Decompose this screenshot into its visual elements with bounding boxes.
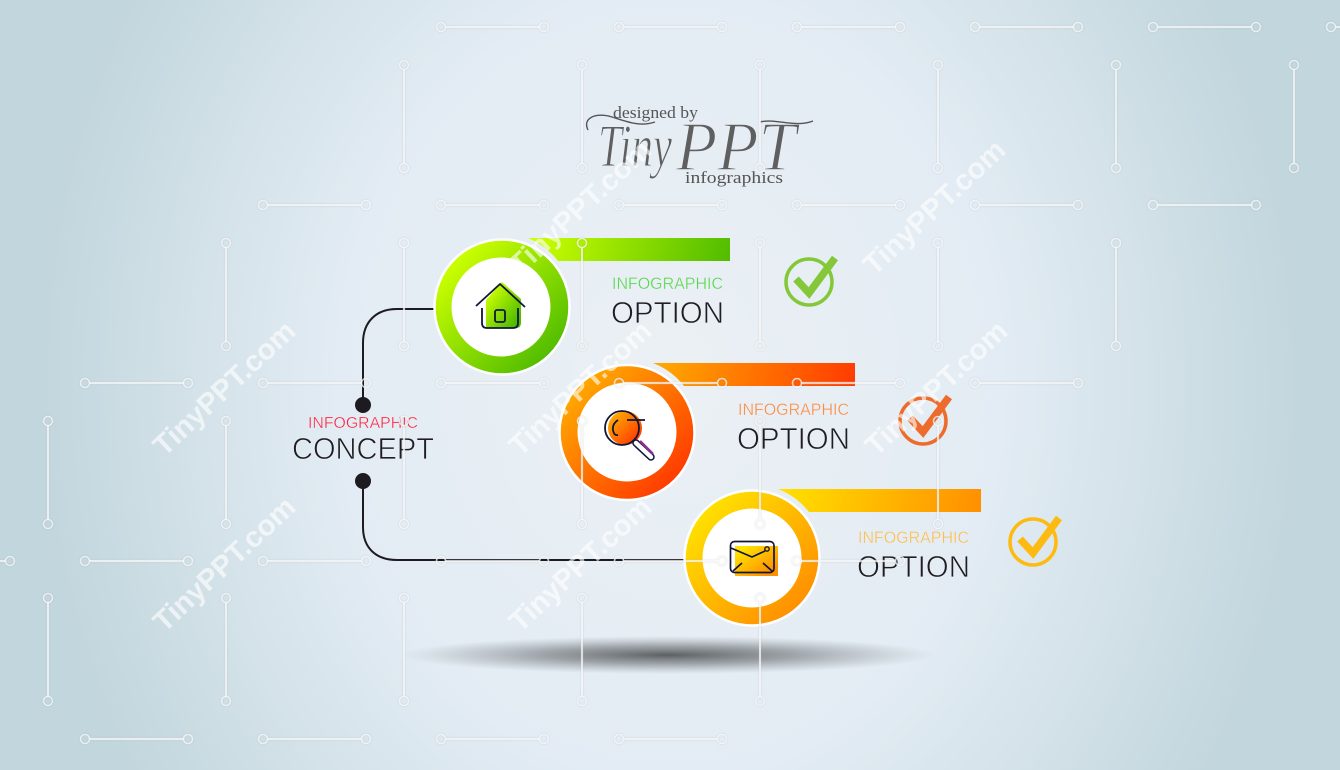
watermarks: TinyPPT.com xyxy=(859,315,1014,462)
connector line top xyxy=(363,309,434,405)
option 2 text: OPTION xyxy=(737,421,850,456)
white disc xyxy=(578,382,676,482)
watermarks: TinyPPT.com xyxy=(147,315,302,462)
icon: house xyxy=(476,282,525,328)
check mark orange xyxy=(900,397,949,444)
option 3 text: INFOGRAPHIC xyxy=(858,529,969,547)
check mark yellow xyxy=(1010,518,1059,565)
check mark green xyxy=(786,258,835,305)
watermarks: TinyPPT.com xyxy=(857,134,1012,281)
icon: magnifier xyxy=(605,411,653,457)
option 3 text xyxy=(857,529,970,584)
yellow ring xyxy=(684,490,820,626)
watermarks: TinyPPT.com xyxy=(503,491,658,638)
white disc xyxy=(702,508,802,608)
icon: envelope xyxy=(730,542,778,576)
logo: designed by TinyPPT infographics: Tiny xyxy=(598,113,672,179)
orange ring xyxy=(560,365,694,500)
option 1 text: INFOGRAPHIC xyxy=(612,275,723,293)
logo: designed by TinyPPT infographics xyxy=(587,103,813,187)
concept label: INFOGRAPHIC xyxy=(308,415,418,432)
white disc xyxy=(452,258,550,356)
option 2 text: INFOGRAPHIC xyxy=(738,401,849,419)
concept label: CONCEPT xyxy=(292,431,434,466)
connector dot bottom xyxy=(355,473,371,489)
option 2 text xyxy=(737,401,850,456)
watermarks: TinyPPT.com xyxy=(503,315,658,462)
panel: option 2 xyxy=(560,363,949,500)
logo: designed by TinyPPT infographics: designed by xyxy=(613,103,699,122)
connector line bottom xyxy=(363,481,685,560)
option 3 text: OPTION xyxy=(857,549,970,584)
green ring xyxy=(434,240,570,374)
panel: option 1 xyxy=(434,238,835,374)
option 1 text xyxy=(611,275,724,330)
orange banner xyxy=(653,363,855,386)
watermarks: TinyPPT.com xyxy=(147,491,302,638)
watermarks xyxy=(147,134,1014,638)
connector dot top xyxy=(355,397,371,413)
concept label xyxy=(292,415,434,466)
logo: designed by TinyPPT infographics: PPT xyxy=(675,109,801,186)
option 1 text: OPTION xyxy=(611,295,724,330)
floor shadow xyxy=(400,636,936,674)
green banner xyxy=(528,238,730,261)
panel: option 3 xyxy=(684,489,1059,626)
logo: designed by TinyPPT infographics: infographics xyxy=(685,168,783,187)
yellow banner xyxy=(778,489,981,512)
watermarks: TinyPPT.com xyxy=(503,134,658,281)
